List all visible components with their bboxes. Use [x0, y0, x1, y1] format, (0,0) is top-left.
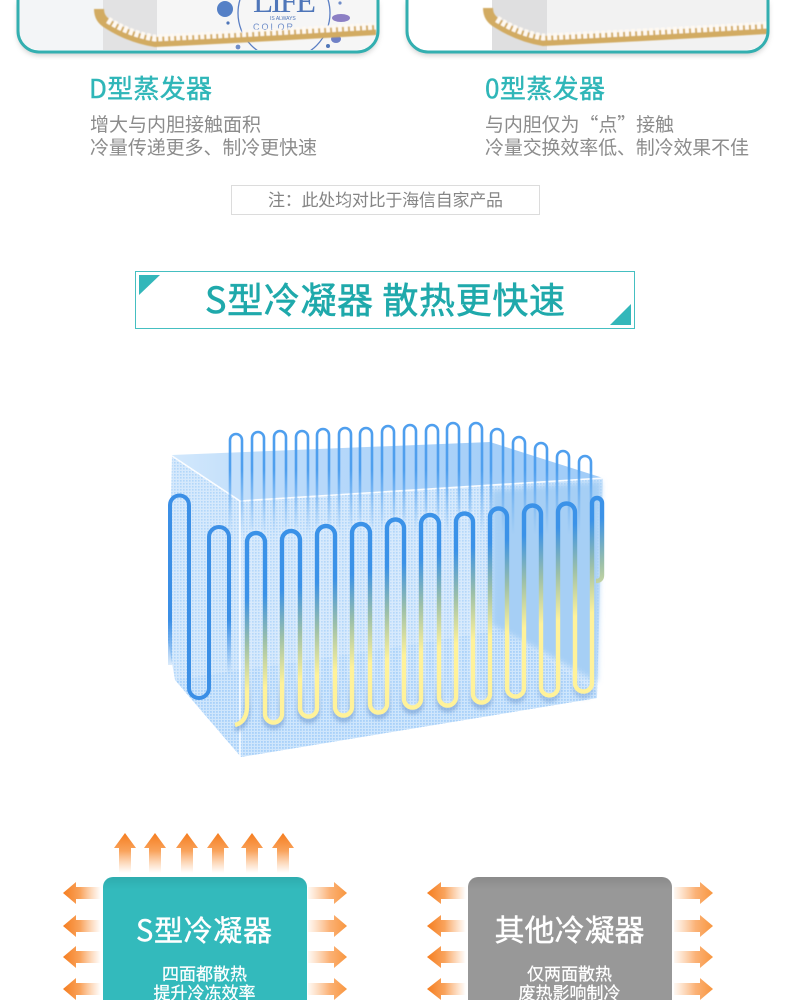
text: D evaporator description: 冷量传递更多、制冷更快速 — [90, 137, 317, 159]
grey condenser card: 仅两面散热 — [527, 960, 612, 985]
stamp: LIFE logo: COLOR — [253, 22, 295, 32]
front coil glow — [247, 514, 490, 722]
heading: O evaporator: 0型蒸发器 — [485, 69, 605, 106]
panel: S condenser comparison — [63, 833, 347, 1000]
grey condenser card — [468, 877, 672, 1000]
text: D evaporator description: 增大与内胆接触面积 — [90, 114, 261, 136]
panel: other condenser comparison — [427, 877, 713, 1000]
arrows: left heat — [63, 882, 101, 1000]
grey condenser card: 其他冷凝器 — [494, 906, 644, 950]
condenser diagram — [168, 423, 603, 757]
panel: O evaporator photo — [407, 0, 769, 52]
teal condenser card: 四面都散热 — [162, 960, 247, 985]
note box — [232, 186, 540, 214]
arrows: right heat — [308, 882, 347, 1000]
arrows: upward heat — [114, 833, 294, 873]
section title: S condenser — [136, 272, 634, 328]
arrows: left heat — [427, 882, 466, 1000]
stamp: LIFE logo — [217, 0, 350, 50]
pearl chain — [99, 9, 376, 42]
condenser box volume — [168, 442, 603, 757]
back coils — [230, 423, 591, 535]
text: O evaporator description: 冷量交换效率低、制冷效果不佳 — [485, 137, 749, 159]
text: O evaporator description: 与内胆仅为“点”接触 — [485, 110, 674, 137]
stamp: LIFE logo: IS ALWAYS — [270, 16, 296, 22]
teal condenser card: S型冷凝器 — [136, 908, 272, 950]
teal condenser card — [103, 877, 307, 1000]
pearl chain — [488, 8, 767, 41]
section title: S condenser: S型冷凝器 散热更快速 — [205, 272, 565, 324]
front coil shadow — [235, 508, 592, 729]
text: O evaporator description — [485, 110, 749, 159]
heading: D evaporator: D型蒸发器 — [89, 69, 212, 106]
front coil: blue to yellow tube — [235, 498, 602, 725]
text: D evaporator description — [90, 114, 317, 159]
panel: D evaporator photo — [18, 0, 379, 59]
arrows: right heat — [674, 882, 713, 1000]
front coil: left blue section — [170, 496, 229, 698]
note box: 注：此处均对比于海信自家产品 — [268, 186, 503, 211]
